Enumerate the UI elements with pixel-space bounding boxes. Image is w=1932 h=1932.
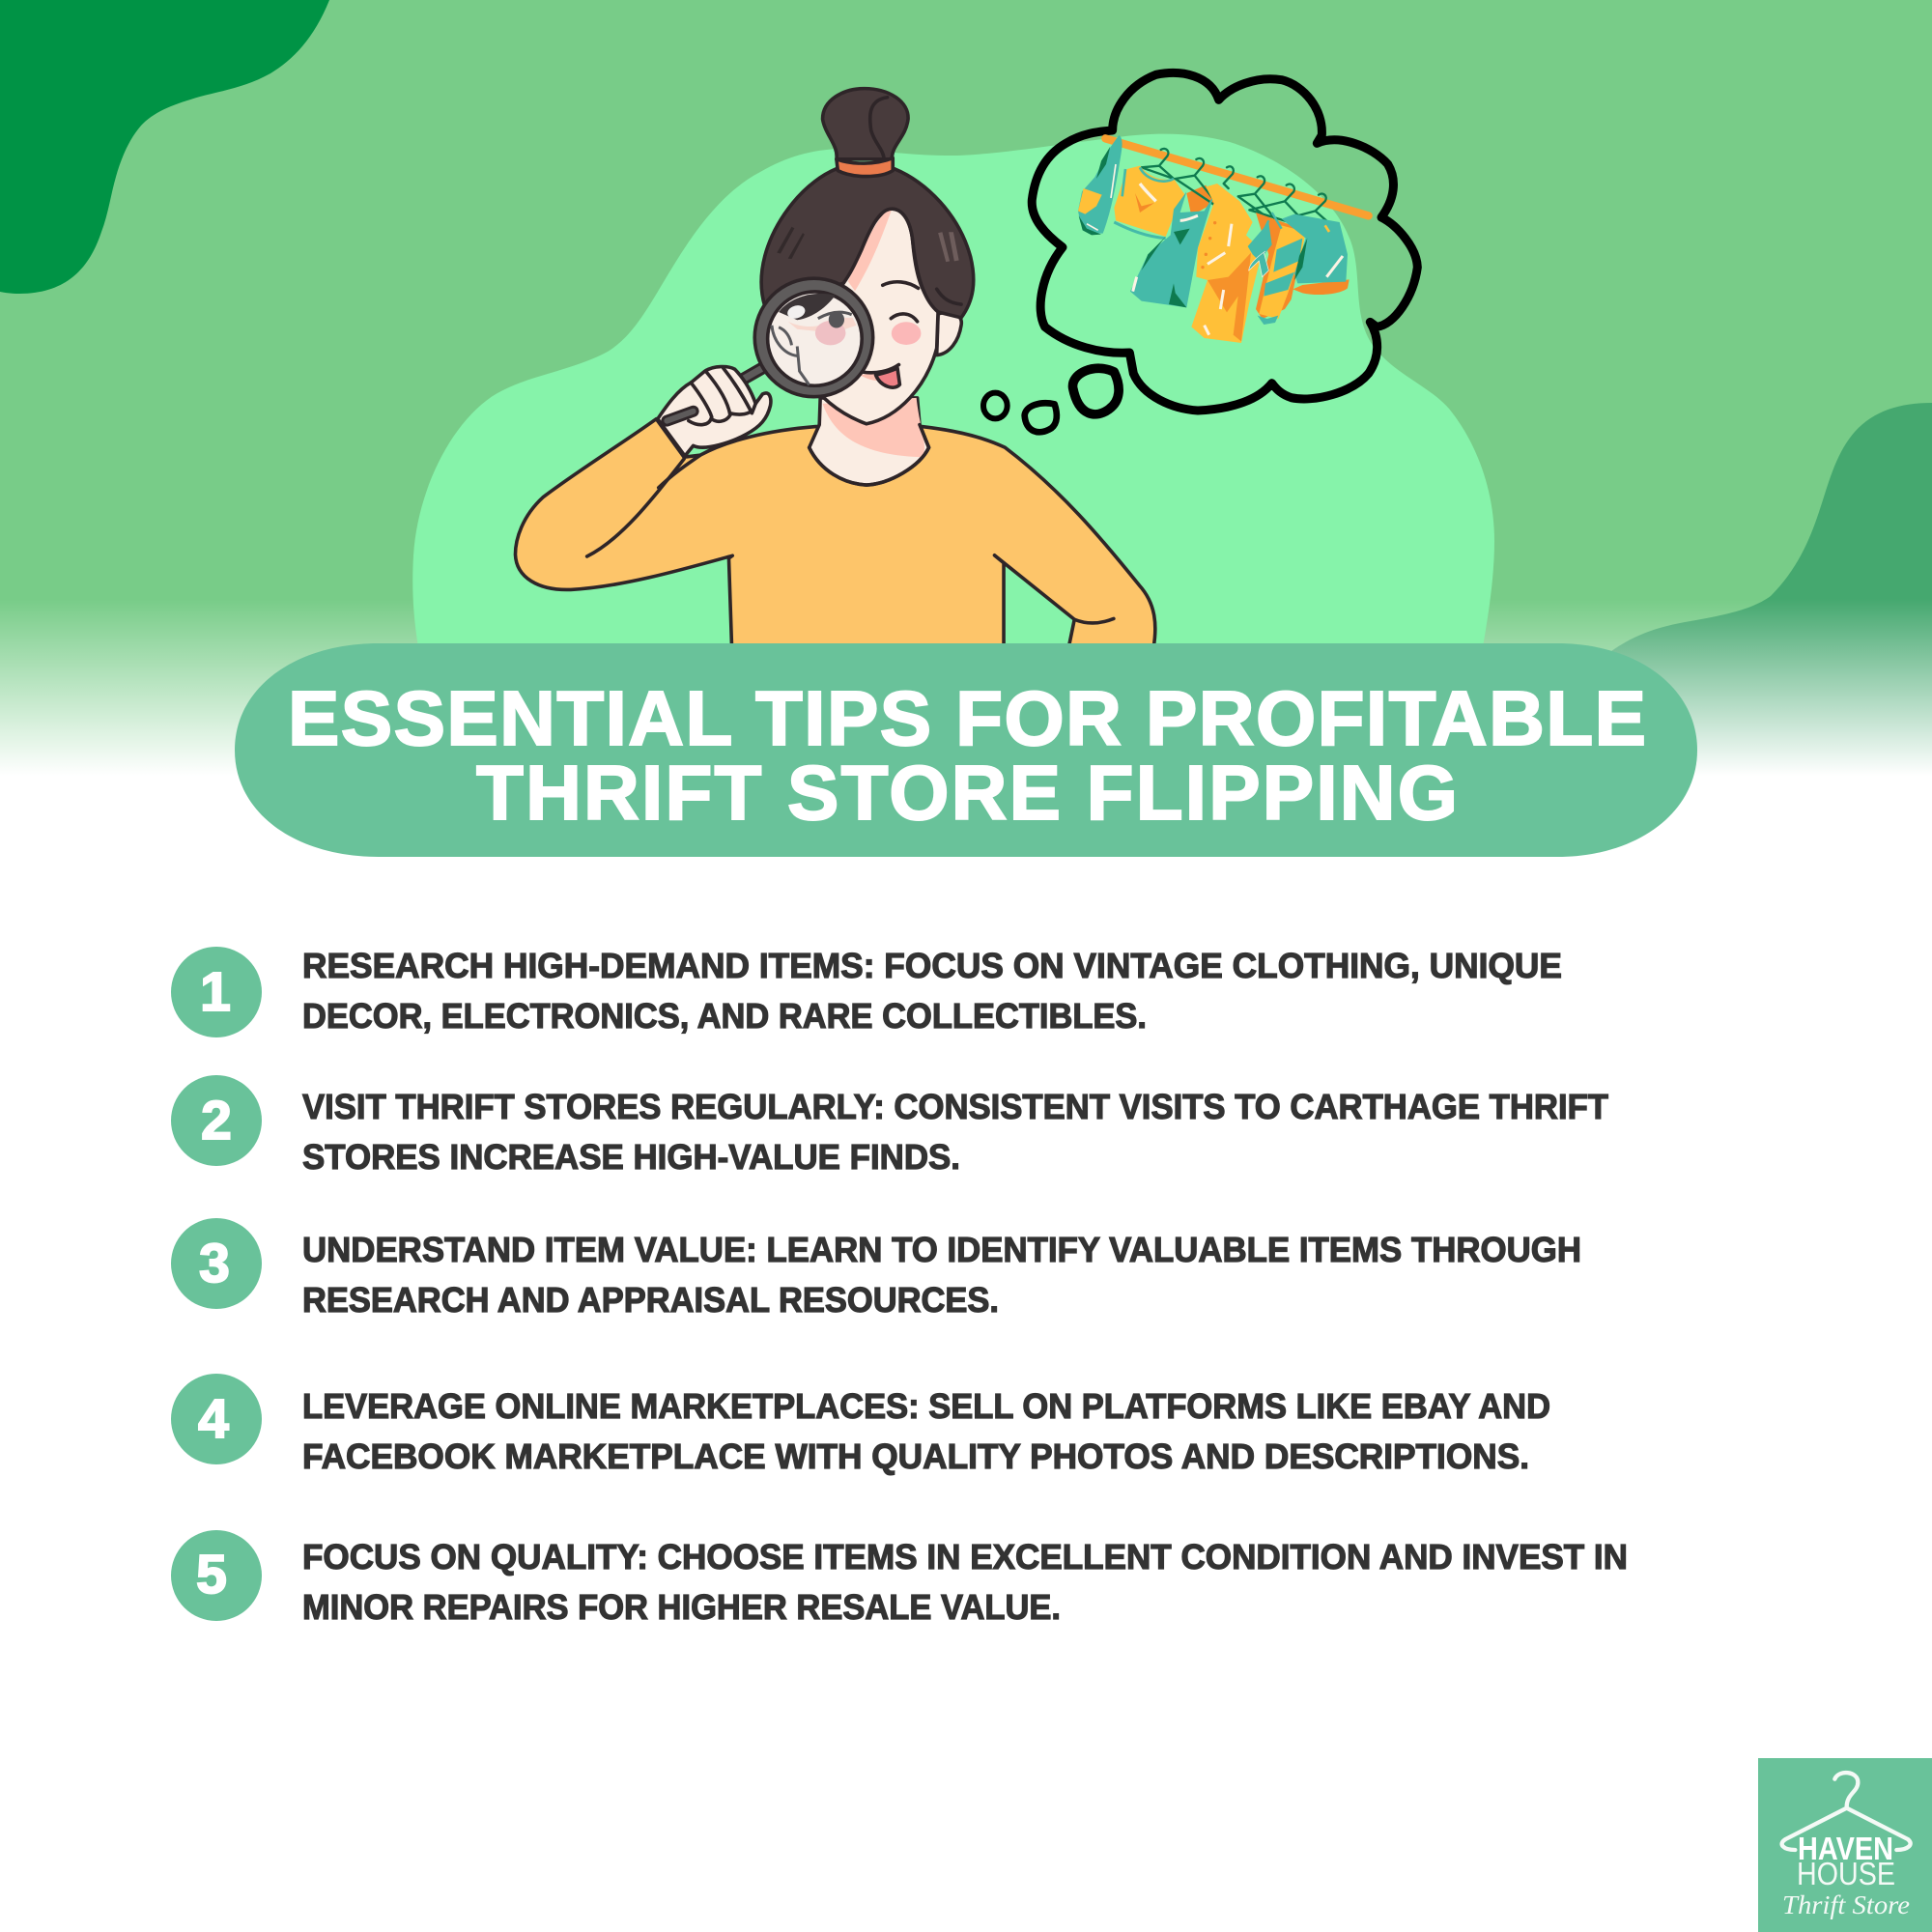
- title banner: [235, 643, 1697, 857]
- number badge 1: 1: [200, 961, 231, 1023]
- number badge 5: 5: [196, 1544, 227, 1605]
- icon: clothes hanger: [1782, 1773, 1911, 1850]
- blob: top left dark green: [0, 0, 329, 294]
- tip 1: [171, 946, 1562, 1037]
- number badge 3: 3: [199, 1233, 230, 1294]
- tip 5 text: MINOR REPAIRS FOR HIGHER RESALE VALUE.: [302, 1587, 1061, 1627]
- tip 4 text: [302, 1386, 1550, 1476]
- hand gripping handle: [658, 366, 771, 456]
- small thought circle: [983, 393, 1008, 418]
- title line 1: ESSENTIAL TIPS FOR PROFITABLE: [288, 675, 1646, 761]
- striped garment with teal tie top: [1248, 213, 1306, 325]
- tip 3 text: RESEARCH AND APPRAISAL RESOURCES.: [302, 1280, 999, 1320]
- tip 2 text: STORES INCREASE HIGH-VALUE FINDS.: [302, 1137, 960, 1177]
- logo script Thrift Store: Thrift Store: [1782, 1890, 1910, 1919]
- number badge 2: [171, 1075, 262, 1166]
- number badge 2: 2: [201, 1090, 232, 1151]
- number badge 5: [171, 1530, 262, 1621]
- tip 3 text: UNDERSTAND ITEM VALUE: LEARN TO IDENTIFY VALUABLE ITEMS THROUGH: [302, 1230, 1581, 1269]
- tip 3: [171, 1218, 1581, 1320]
- number badge 1: [171, 947, 262, 1037]
- magnifier lens: [754, 278, 873, 397]
- blob: right mid green: [1604, 403, 1932, 782]
- title line 2: THRIFT STORE FLIPPING: [476, 750, 1458, 836]
- tip 5: [171, 1530, 1628, 1627]
- banner pill: [235, 643, 1697, 857]
- hair: [761, 169, 974, 318]
- tip 4 text: FACEBOOK MARKETPLACE WITH QUALITY PHOTOS AND DESCRIPTIONS.: [302, 1436, 1529, 1476]
- teal dress: [1130, 191, 1214, 307]
- tip 1 text: RESEARCH HIGH-DEMAND ITEMS: FOCUS ON VINTAGE CLOTHING, UNIQUE: [302, 946, 1562, 985]
- number badge 4: [171, 1374, 262, 1464]
- logo: Haven House Thrift Store: [1758, 1758, 1932, 1932]
- ear: [937, 312, 961, 355]
- neck: [810, 398, 929, 485]
- logo word HAVEN: HAVEN: [1798, 1831, 1893, 1866]
- medium thought circle: [1025, 403, 1057, 432]
- hangers: [1142, 149, 1330, 229]
- number badge 4: 4: [198, 1388, 229, 1450]
- thought bubble: [983, 72, 1417, 432]
- blob: central mint: [412, 134, 1494, 647]
- tip 2 text: [302, 1087, 1608, 1177]
- bubble outline: [1032, 72, 1417, 411]
- hair bun: [823, 89, 908, 177]
- sweater: [515, 419, 1155, 669]
- logo word HOUSE: HOUSE: [1797, 1856, 1895, 1891]
- yellow jacket and trousers: [1191, 184, 1263, 343]
- tip 5 text: FOCUS ON QUALITY: CHOOSE ITEMS IN EXCELLENT CONDITION AND INVEST IN: [302, 1537, 1628, 1577]
- white fade overlay: [0, 599, 1932, 782]
- large thought circle: [1073, 368, 1119, 414]
- face: [779, 209, 938, 424]
- tip 2 text: VISIT THRIFT STORES REGULARLY: CONSISTENT VISITS TO CARTHAGE THRIFT: [302, 1087, 1608, 1126]
- header background: [0, 0, 1932, 782]
- illustration: person with magnifying glass: [515, 89, 1155, 669]
- tip 3 text: [302, 1230, 1581, 1320]
- teal shorts: [1282, 214, 1350, 295]
- tip 5 text: [302, 1537, 1628, 1627]
- tip 1 text: DECOR, ELECTRONICS, AND RARE COLLECTIBLES.: [302, 996, 1147, 1036]
- bag: [1078, 135, 1122, 235]
- yellow jacket back shading: [1186, 185, 1214, 215]
- tip 2: [171, 1075, 1608, 1177]
- clothes rail: [1105, 138, 1369, 215]
- number badge 3: [171, 1218, 262, 1309]
- tip 4 text: LEVERAGE ONLINE MARKETPLACES: SELL ON PLATFORMS LIKE EBAY AND: [302, 1386, 1550, 1426]
- tip 1 text: [302, 946, 1562, 1036]
- magnifier handle: [670, 363, 771, 421]
- tip 4: [171, 1374, 1550, 1476]
- clothes rack illustration: [1078, 135, 1369, 343]
- yellow crop top: [1114, 166, 1185, 239]
